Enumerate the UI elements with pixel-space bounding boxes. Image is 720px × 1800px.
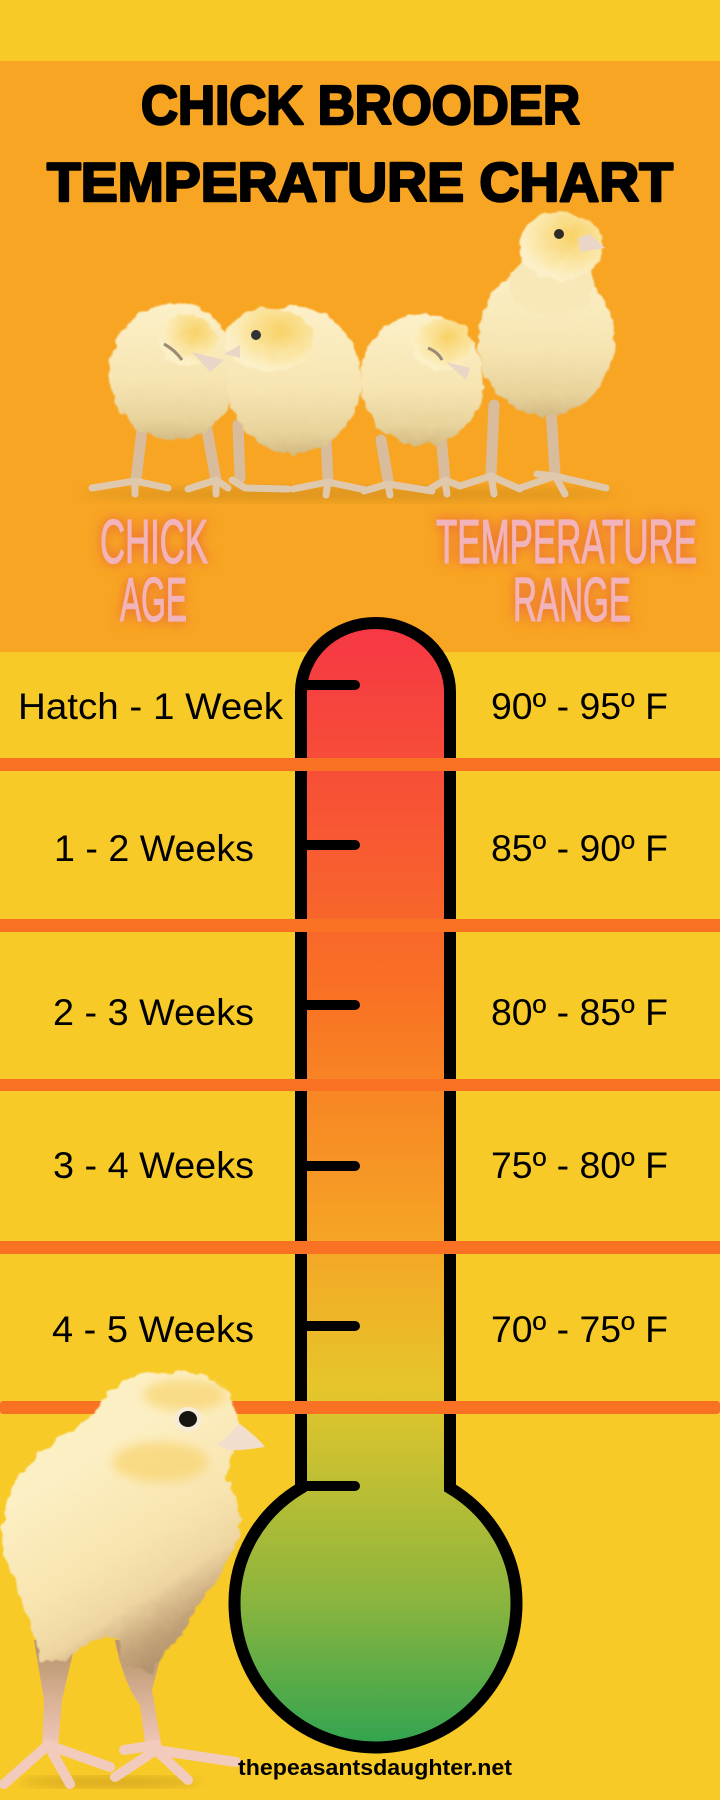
chick 3 <box>360 315 484 445</box>
large chick head shading <box>112 1379 227 1482</box>
chick 2 face <box>224 330 261 358</box>
title: TEMPERATURE CHART <box>47 151 673 213</box>
chick 4 face <box>554 229 605 252</box>
chick 1 face <box>164 344 224 372</box>
illustration: four chicks <box>80 212 620 501</box>
column heading: chick age: AGE <box>120 566 187 635</box>
title <box>47 74 673 213</box>
chick age labels: 1 - 2 Weeks <box>54 828 254 869</box>
chick age labels: 3 - 4 Weeks <box>53 1145 254 1186</box>
thermometer tube and bulb <box>234 623 517 1748</box>
illustration: large chick <box>2 1372 265 1787</box>
chick age labels: 2 - 3 Weeks <box>53 992 254 1033</box>
row divider lines <box>0 758 720 1414</box>
temperature range labels <box>491 686 668 1350</box>
column heading: chick age <box>100 508 208 635</box>
temperature range labels: 90º - 95º F <box>491 686 668 727</box>
title: CHICK BROODER <box>141 74 580 136</box>
large chick beak <box>216 1424 265 1450</box>
chick 3 face <box>428 348 470 380</box>
large chick feet <box>4 1745 236 1784</box>
chick legs and feet <box>92 405 606 495</box>
chick 2 <box>226 306 361 454</box>
large chick body <box>2 1372 240 1672</box>
large chick legs <box>34 1640 165 1750</box>
header panel <box>0 61 720 652</box>
temperature range labels: 70º - 75º F <box>491 1309 668 1350</box>
temperature range labels: 75º - 80º F <box>491 1145 668 1186</box>
column heading: temperature range <box>436 508 697 635</box>
large chick shadow <box>20 1777 200 1787</box>
website footer: thepeasantsdaughter.net <box>238 1755 513 1780</box>
thermometer tick marks <box>303 685 355 1486</box>
column heading: chick age: CHICK <box>100 508 208 577</box>
thermometer <box>234 623 517 1748</box>
chick age labels <box>18 686 284 1350</box>
chick age labels: Hatch - 1 Week <box>18 686 284 727</box>
ground shadow <box>80 487 620 501</box>
temperature range labels: 85º - 90º F <box>491 828 668 869</box>
chick 4 <box>478 212 614 416</box>
chick age labels: 4 - 5 Weeks <box>52 1309 254 1350</box>
large chick eye <box>174 1407 202 1431</box>
chick 1 <box>109 304 239 440</box>
temperature range labels: 80º - 85º F <box>491 992 668 1033</box>
